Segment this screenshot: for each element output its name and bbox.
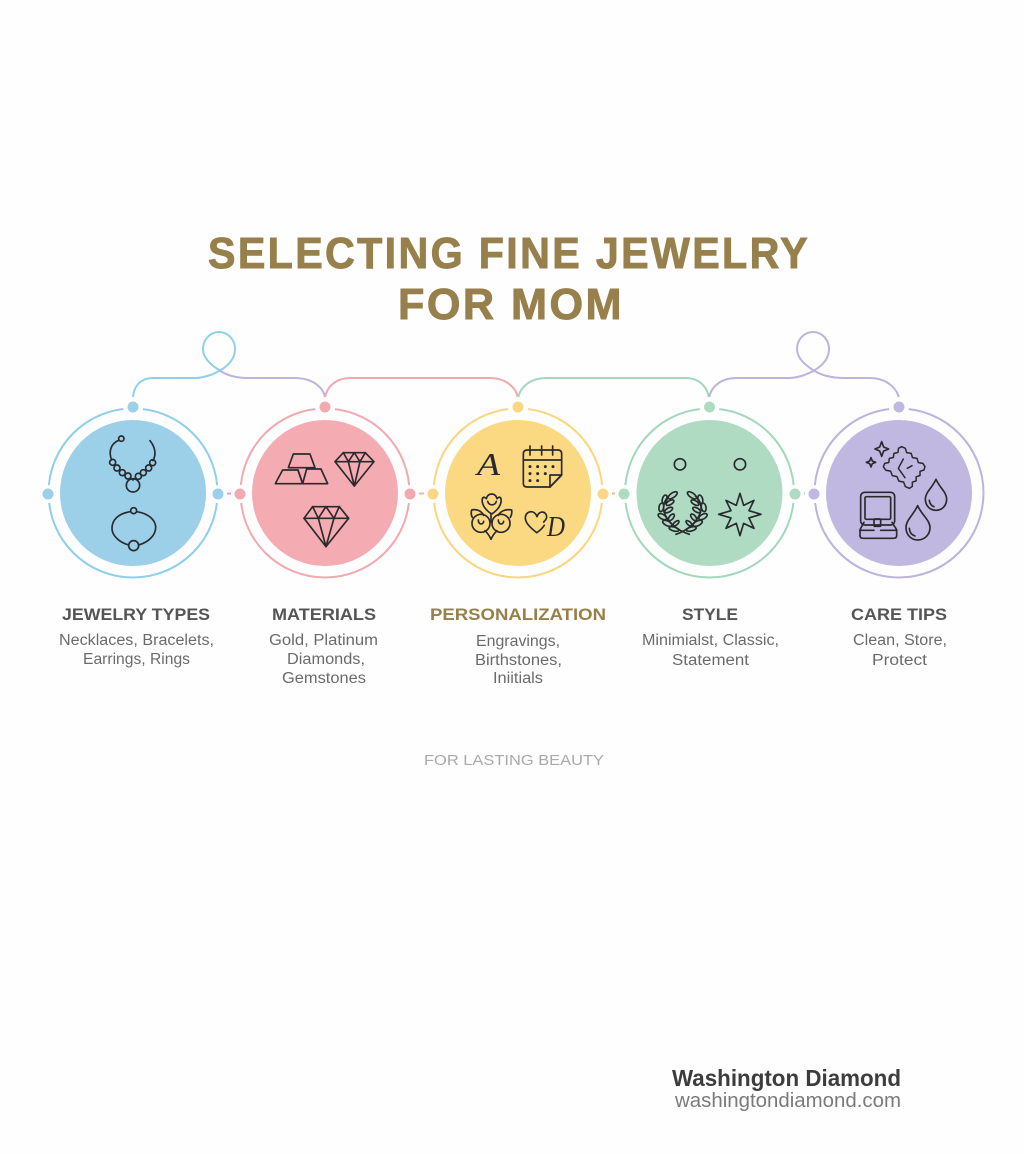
label: style: Statement: [672, 652, 750, 669]
label: materials: Gemstones: [282, 670, 366, 687]
icon: bracelet: [112, 508, 156, 551]
panel: style circle: [615, 397, 804, 578]
icon: polishing cloth: [883, 447, 925, 488]
label: personalization: Engravings,: [476, 633, 560, 650]
label: personalization: PERSONALIZATION: [430, 605, 606, 624]
label: style: [642, 605, 779, 669]
label: materials: [269, 605, 378, 687]
icon: heart with letter D: D: [546, 511, 565, 543]
icon: water drops: [906, 479, 947, 540]
label: jewelry types: [59, 605, 214, 668]
label: materials: MATERIALS: [272, 605, 376, 624]
panel: care tips circle: [805, 397, 984, 578]
label: style: STYLE: [682, 605, 738, 624]
label: jewelry types: JEWELRY TYPES: [62, 605, 210, 624]
icon: eight-point star: [719, 493, 761, 536]
footer brand: washingtondiamond.com: [674, 1090, 901, 1112]
icon: birth flower: [471, 494, 512, 539]
icon: heart with letter D: [525, 511, 565, 543]
icon: ring box: [860, 492, 897, 538]
label: care tips: [851, 605, 947, 669]
label: personalization: Iniitials: [493, 670, 543, 687]
label: personalization: [430, 605, 606, 687]
label: care tips: Clean, Store,: [853, 632, 947, 649]
panel: materials circle: [231, 397, 419, 578]
icon: sparkles: [866, 442, 889, 467]
dashed links between circles: [226, 492, 806, 494]
icon: gold bars: [275, 454, 328, 484]
label: jewelry types: Necklaces, Bracelets,: [59, 632, 214, 649]
label: jewelry types: Earrings, Rings: [83, 651, 190, 668]
footer brand: Washington Diamond: [672, 1065, 901, 1091]
label: personalization: Birthstones,: [475, 652, 562, 669]
label: materials: Gold, Platinum: [269, 632, 378, 649]
title: FOR MOM: [398, 280, 624, 329]
label: care tips: CARE TIPS: [851, 605, 947, 624]
icon: laurel wreath: [657, 490, 708, 534]
icon: script letter A: A: [475, 446, 501, 482]
label: care tips: Protect: [872, 652, 928, 669]
panel: personalization circle: [424, 397, 612, 578]
label: materials: Diamonds,: [287, 651, 365, 668]
icon: necklace: [110, 436, 156, 492]
icon: large diamond: [304, 507, 349, 547]
footer brand: [672, 1065, 901, 1112]
title: SELECTING FINE JEWELRY: [208, 229, 810, 278]
label: style: Minimialst, Classic,: [642, 632, 779, 649]
panel: jewelry types circle: [39, 397, 227, 578]
tagline: FOR LASTING BEAUTY: [424, 752, 604, 769]
title: [208, 229, 810, 329]
icon: calendar: [523, 446, 562, 487]
connector lines with loops: [133, 332, 899, 399]
icon: stud earrings: [674, 459, 746, 470]
icon: small diamond: [335, 453, 374, 486]
